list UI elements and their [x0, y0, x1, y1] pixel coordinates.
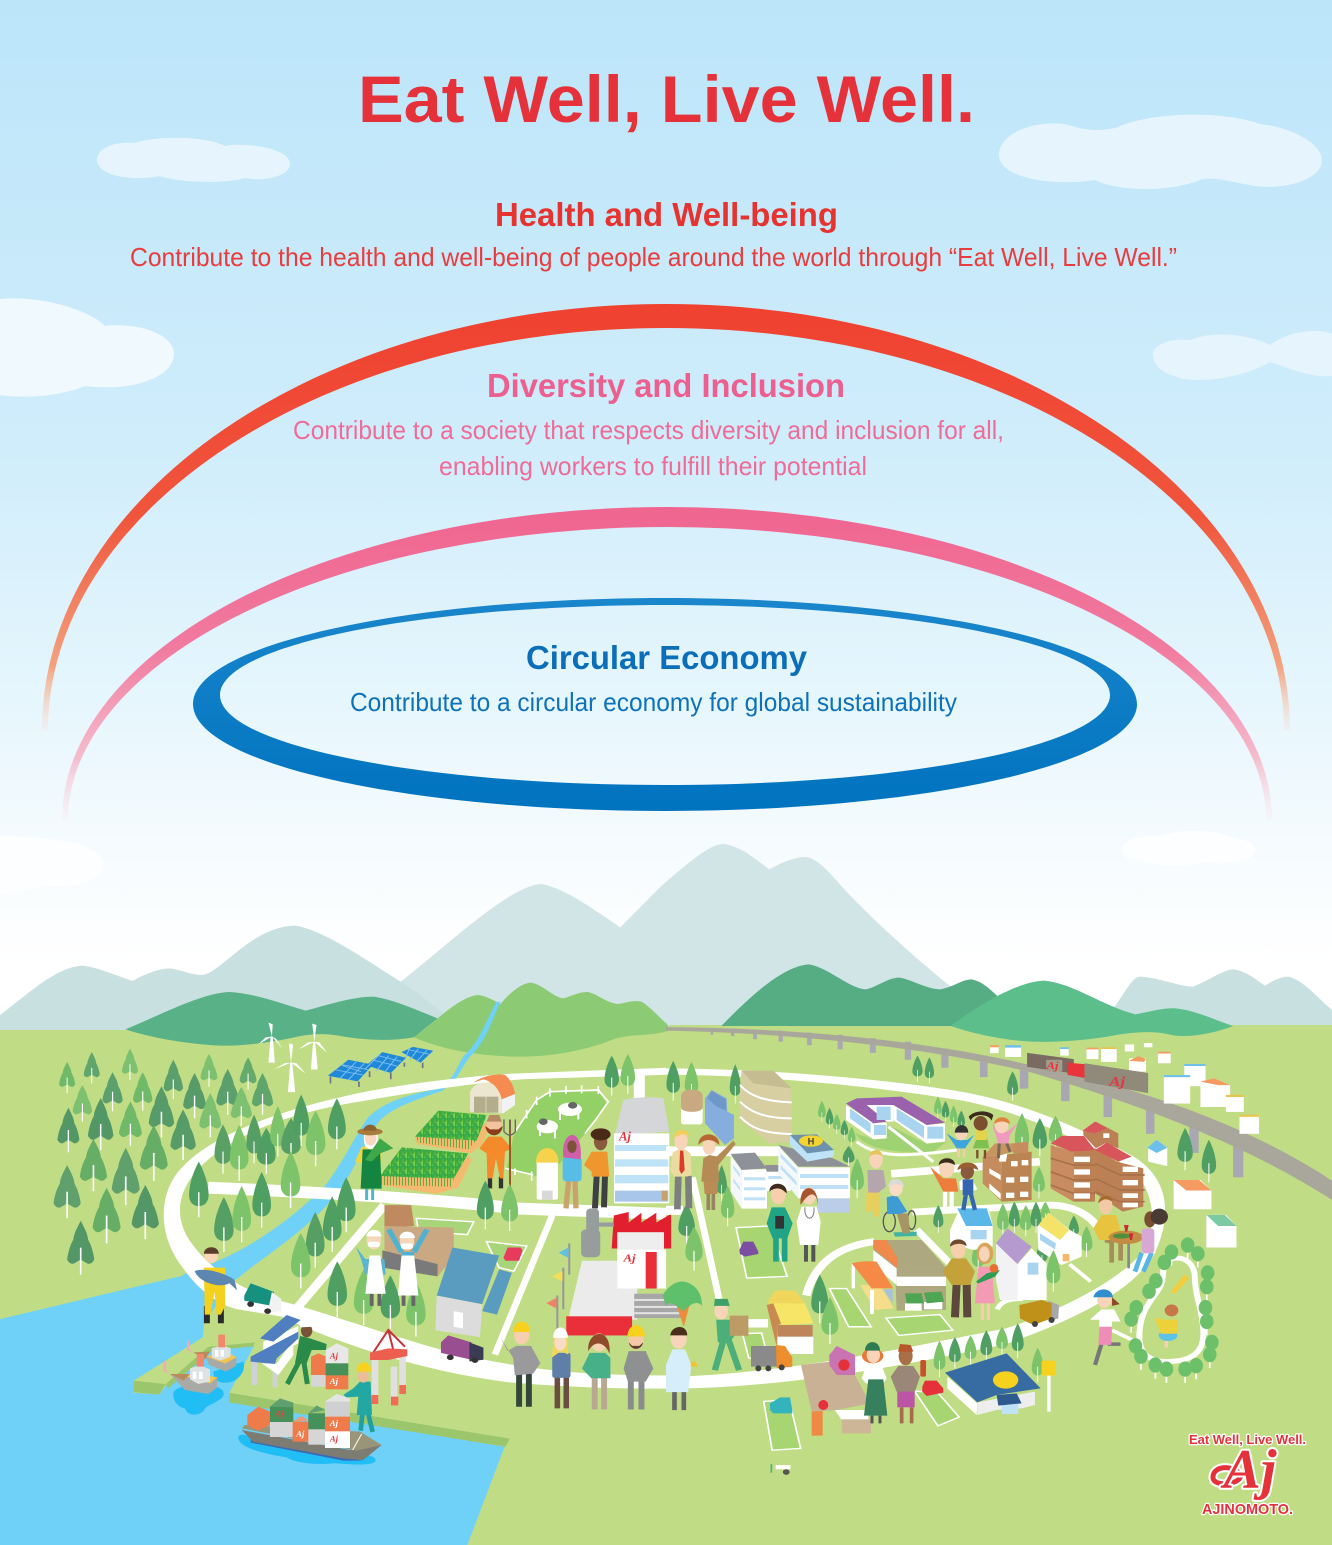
heading: circular economy: Circular Economy: [526, 639, 808, 676]
office tower with Aj logo: Aj: [618, 1130, 631, 1144]
shops district: [751, 1239, 1059, 1436]
heading: health and well-being: Health and Well-being: [495, 196, 838, 233]
person: nurse in teal: [767, 1184, 793, 1262]
woman in green jacket: [582, 1333, 610, 1409]
cargo ship: [238, 1394, 382, 1465]
person: runner in cap: [1090, 1289, 1121, 1365]
red car: [503, 1247, 523, 1261]
person: blond man pushing wheelchair: [867, 1150, 886, 1217]
fishing boats: [163, 1335, 244, 1415]
crop fields: [380, 1111, 490, 1194]
left half of town: [0, 1002, 681, 1545]
purple roof house: [996, 1228, 1047, 1300]
containers: Aj: [329, 1418, 339, 1428]
person: delivery man with box: [714, 1299, 748, 1370]
helipad: H: [808, 1136, 815, 1146]
yellow-roof bakery: [767, 1291, 813, 1354]
port area: [163, 1315, 407, 1465]
child in pink: [992, 1117, 1018, 1158]
office tower with Aj logo: [614, 1097, 669, 1203]
blue office tower: [705, 1090, 734, 1145]
boats splash: [173, 1362, 244, 1415]
supermarket: [852, 1240, 946, 1314]
person: woman in tan suit waving: [698, 1134, 736, 1210]
person: doctor in white coat: [797, 1187, 821, 1262]
child in denim overalls: [957, 1162, 978, 1210]
far mountains: [0, 844, 1332, 1033]
logo mark flourish fill: [1213, 1468, 1240, 1484]
tank: [681, 1089, 703, 1124]
farm plot beside food factory: [416, 1218, 527, 1271]
person: man with red tie: [670, 1130, 692, 1209]
person: woman in pink dress with baby: [975, 1243, 1000, 1320]
wind turbines: [258, 1023, 327, 1092]
cargo boxes: Aj: [329, 1350, 339, 1360]
worker 1: [356, 1230, 386, 1306]
cargo boxes: [311, 1343, 348, 1389]
local roads and park path: [666, 1151, 1203, 1362]
brown corner building: [983, 1142, 1032, 1202]
yellow roof house: [1037, 1213, 1082, 1265]
school lawn and paths: [855, 1125, 957, 1162]
hospital district: [670, 1071, 957, 1271]
solar panels: [328, 1047, 433, 1087]
person: scientist with flask: [666, 1327, 698, 1410]
background: sky gradient: [0, 0, 1332, 1100]
quay edges: [134, 1342, 510, 1447]
containers: Aj: [295, 1429, 305, 1439]
blue roof restaurant: [945, 1353, 1041, 1415]
main block: [778, 1145, 850, 1213]
freight train: Aj: [1045, 1060, 1059, 1072]
small houses beyond the railway: [990, 1043, 1259, 1247]
purple-roofed school: [846, 1097, 945, 1143]
food factory: Aj: [622, 1252, 636, 1264]
pasture with cows and fence: [505, 1085, 608, 1181]
child in blue: [947, 1125, 974, 1157]
person: diner with curly hair: [1135, 1209, 1168, 1272]
factory workers in aprons: [356, 1229, 427, 1306]
sea: [0, 1275, 505, 1545]
text: health and well-being description: Contribute to the health and well-being of people around the world through “Eat Well, Live Well.”: [130, 242, 1177, 272]
person: farmer woman with vegetables: [355, 1125, 393, 1200]
park trees: [1124, 1237, 1219, 1383]
hospital: [731, 1134, 850, 1213]
palm tree: [663, 1282, 702, 1327]
tree in front of house: [1046, 1250, 1060, 1292]
person: fisherman with fish: [195, 1247, 237, 1323]
title: Eat Well, Live Well.: [358, 62, 975, 136]
parking lots: [736, 1226, 959, 1450]
person: man in orange jacket: [584, 1128, 611, 1208]
teal car: [770, 1397, 792, 1413]
ground: [0, 1025, 1332, 1545]
small tractor: [771, 1464, 790, 1475]
blue warehouse: [435, 1247, 512, 1337]
child in orange: [930, 1158, 958, 1210]
arc: health and well-being (red): [42, 304, 1290, 730]
front row workers: [500, 1322, 653, 1409]
person: man with bottle: [891, 1344, 926, 1423]
grey and orange truck: [751, 1345, 792, 1371]
logo slogan: Eat Well, Live Well.: [1189, 1432, 1306, 1447]
road ring, west side: [164, 1068, 666, 1389]
person: dock worker in teal: [343, 1362, 373, 1432]
gold delivery truck: [1019, 1300, 1059, 1327]
person: dock worker in green: [287, 1317, 327, 1384]
worker 2: [389, 1229, 427, 1306]
text: circular economy description: Contribute to a circular economy for global sustainability: [350, 687, 957, 717]
west wing: [731, 1153, 767, 1209]
ship splash: [238, 1435, 376, 1465]
containers: Aj: [274, 1409, 284, 1419]
person: diner in yellow: [1093, 1196, 1122, 1263]
river: [183, 1002, 500, 1299]
farm and campus scene: [355, 1074, 669, 1231]
food factory: [566, 1212, 681, 1335]
flags: [546, 1243, 569, 1328]
Ajinomoto logo: [1189, 1432, 1306, 1518]
red harbor crane: [370, 1330, 407, 1405]
restaurant sign: [1042, 1361, 1056, 1412]
containers: [247, 1394, 350, 1448]
trees and forest: [54, 1049, 635, 1336]
purple truck: [441, 1335, 483, 1363]
person: shop clerk in green apron: [862, 1342, 887, 1423]
girl playing in park: [1155, 1304, 1178, 1348]
woman with white helmet: [551, 1327, 571, 1408]
cargo boxes: Aj: [329, 1376, 339, 1386]
person: woman in hijab: [563, 1135, 582, 1208]
blue roof house: [950, 1208, 993, 1250]
slide in park: [1171, 1275, 1189, 1294]
mountains and hills: [0, 844, 1332, 1545]
red car: [922, 1381, 943, 1396]
elevated railway: [666, 1027, 1332, 1200]
hull: [242, 1425, 382, 1461]
logo mark flourish: [1213, 1468, 1240, 1484]
storage tanks: [581, 1209, 614, 1257]
man with beard and yellow helmet: [624, 1325, 653, 1409]
dock building: [251, 1315, 301, 1387]
connector: [765, 1165, 791, 1191]
upper boat: [187, 1335, 237, 1372]
freight train: [1027, 1053, 1148, 1093]
containers: Aj: [329, 1434, 339, 1444]
person: farmer man with pitchfork: [479, 1115, 515, 1190]
trees in front of hospital: [678, 1165, 734, 1271]
clouds: [0, 115, 1332, 894]
curved beige office: [740, 1071, 792, 1144]
purple car on parking: [739, 1242, 758, 1257]
arc: diversity and inclusion (pink): [62, 507, 1272, 820]
green hills: [125, 964, 1233, 1057]
text: diversity and inclusion description: enabling workers to fulfill their potential: [439, 451, 867, 481]
road ring, east side: [666, 1068, 1165, 1389]
table with food: [1109, 1225, 1143, 1268]
barn: [470, 1074, 515, 1113]
logo mark: Aj: [1221, 1439, 1277, 1501]
worker in grey with yellow helmet: [500, 1322, 540, 1407]
brown processing building: [382, 1205, 454, 1276]
residential district: [930, 1111, 1168, 1300]
person: elder in wheelchair: [883, 1179, 917, 1237]
local roads: [208, 1075, 666, 1355]
person: man in mustard sweater: [943, 1239, 975, 1317]
ring: circular economy (blue): [193, 598, 1137, 811]
tan store with pink box: [801, 1346, 871, 1436]
silo: [536, 1148, 559, 1200]
text: diversity and inclusion description: Contribute to a society that respects diversity and inclusion for all,: [293, 415, 1004, 445]
trees in front of road: [477, 1181, 518, 1231]
lower boat: [163, 1354, 217, 1394]
teal truck: [244, 1283, 281, 1314]
east town base: [663, 1027, 1332, 1475]
trees: [666, 1056, 1216, 1382]
apartment blocks: [1051, 1122, 1145, 1212]
logo wordmark: AJINOMOTO.: [1202, 1501, 1293, 1518]
heading: diversity and inclusion: Diversity and Inclusion: [487, 367, 845, 404]
dining couple: [1093, 1196, 1168, 1272]
child in yellow: [969, 1111, 993, 1158]
freight train: Aj: [1108, 1075, 1126, 1090]
